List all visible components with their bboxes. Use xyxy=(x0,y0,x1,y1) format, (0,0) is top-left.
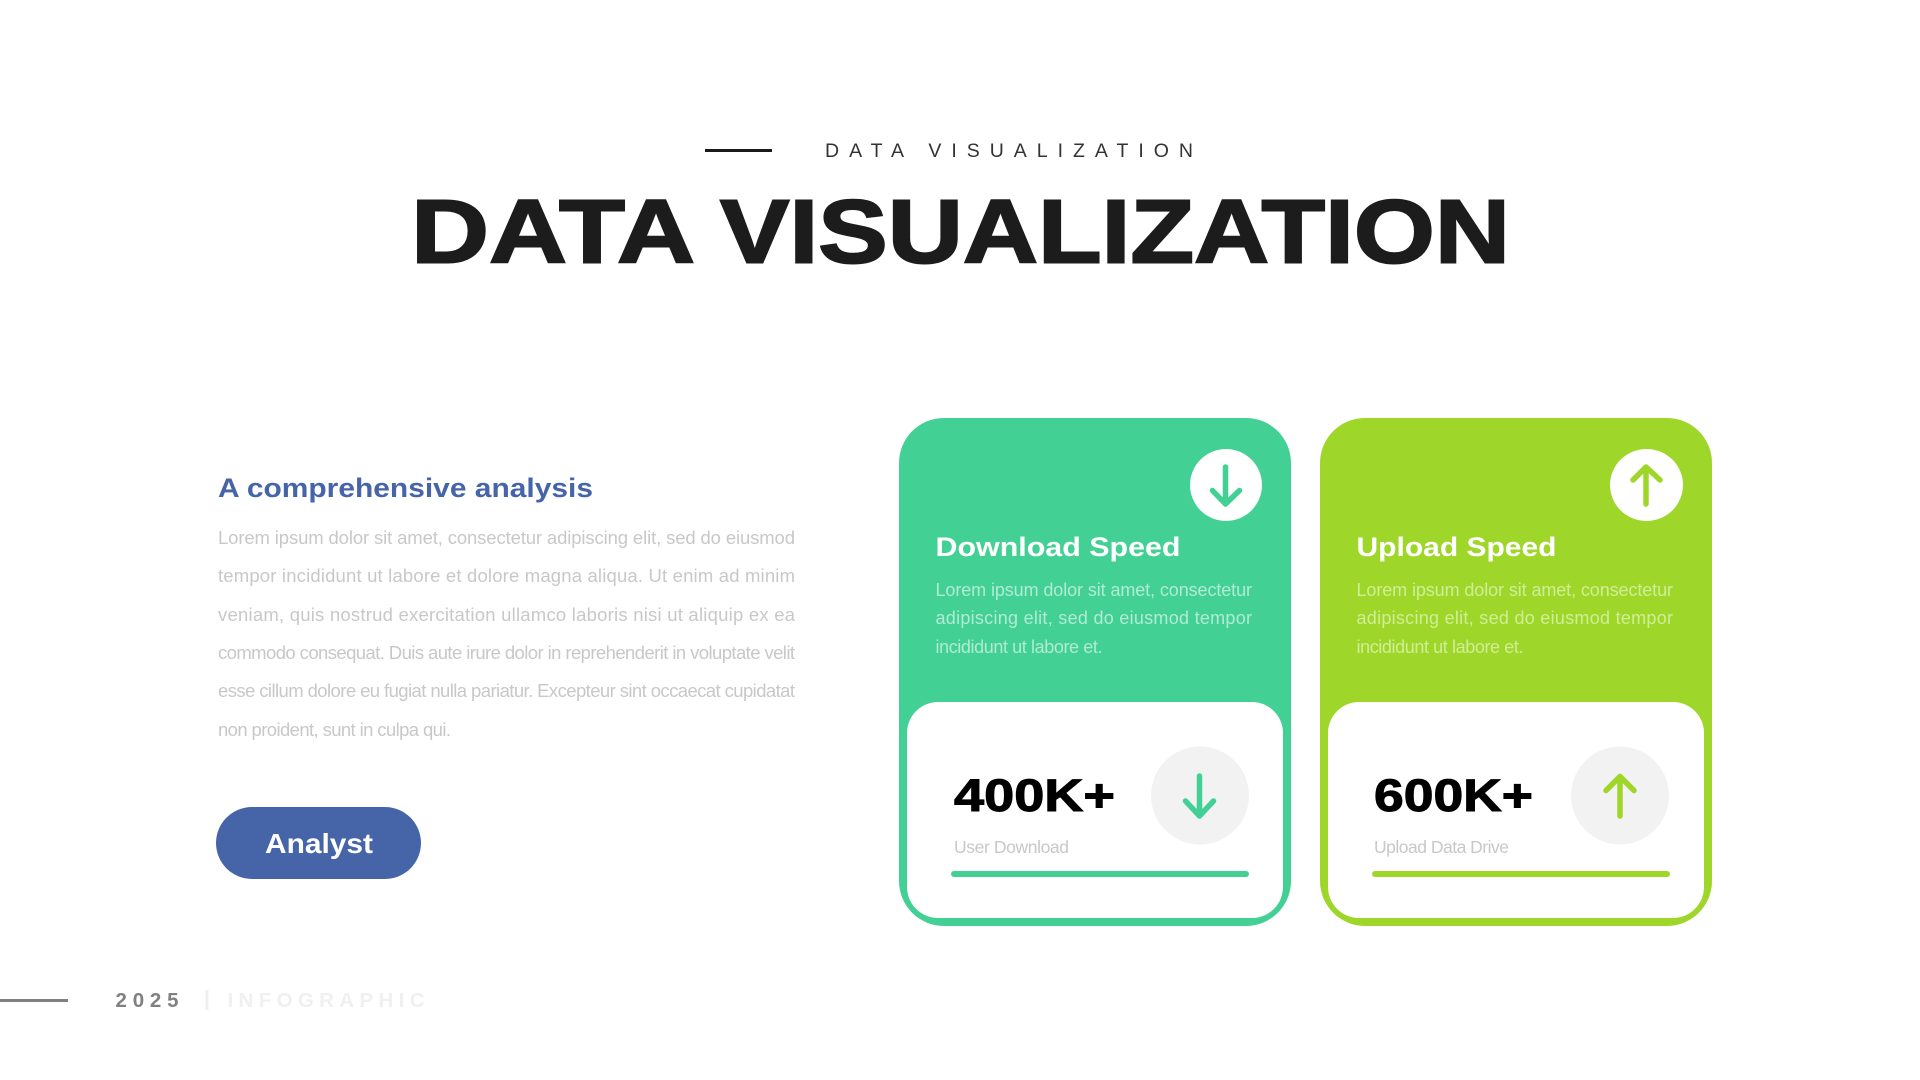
stat panel xyxy=(1328,702,1704,918)
card heading: Upload Speed xyxy=(1356,532,1556,562)
progress bar xyxy=(1372,871,1670,877)
stat label: Upload Data Drive xyxy=(1374,837,1509,857)
kicker text: DATA VISUALIZATION xyxy=(825,140,1193,162)
card background xyxy=(1320,418,1712,926)
heading: A comprehensive analysis xyxy=(218,473,593,503)
stat label: User Download xyxy=(954,837,1069,857)
footer rule xyxy=(0,999,68,1002)
title: DATA xyxy=(411,182,695,282)
body paragraph xyxy=(218,527,796,740)
title: VISUALIZATION xyxy=(720,182,1510,282)
button: Analyst: Analyst xyxy=(265,828,373,859)
footer label: INFOGRAPHIC xyxy=(228,989,425,1012)
body paragraph: veniam, quis nostrud exercitation ullamco laboris nisi ut aliquip ex ea xyxy=(218,604,796,625)
stat value: 400K+ xyxy=(954,770,1115,821)
footer xyxy=(0,989,425,1012)
title xyxy=(411,182,1510,282)
card description xyxy=(1356,580,1673,657)
progress bar xyxy=(951,871,1249,877)
panel: left analysis text xyxy=(216,473,796,879)
kicker rule xyxy=(705,149,772,152)
icon: download arrow in grey circle xyxy=(1151,746,1249,844)
body paragraph: esse cillum dolore eu fugiat nulla pariatur. Excepteur sint occaecat cupidatat xyxy=(218,680,795,701)
card description: incididunt ut labore et. xyxy=(936,637,1102,657)
body paragraph: Lorem ipsum dolor sit amet, consectetur adipiscing elit, sed do eiusmod xyxy=(218,527,795,548)
header xyxy=(411,140,1510,282)
card description: incididunt ut labore et. xyxy=(1356,637,1524,657)
icon: download arrow badge xyxy=(1190,449,1262,521)
card description: Lorem ipsum dolor sit amet, consectetur xyxy=(1356,580,1673,600)
button: Analyst xyxy=(216,807,421,879)
body paragraph: non proident, sunt in culpa qui. xyxy=(218,719,451,740)
footer separator xyxy=(206,990,208,1010)
card description: Lorem ipsum dolor sit amet, consectetur xyxy=(936,580,1252,600)
card background xyxy=(899,418,1291,926)
body paragraph: commodo consequat. Duis aute irure dolor in reprehenderit in voluptate velit xyxy=(218,642,795,663)
panel: upload speed card xyxy=(1320,418,1712,926)
panel: download speed card xyxy=(899,418,1291,926)
stat panel xyxy=(907,702,1283,918)
card description: adipiscing elit, sed do eiusmod tempor xyxy=(936,608,1252,628)
card heading: Download Speed xyxy=(936,532,1180,562)
footer year: 2025 xyxy=(116,989,178,1012)
icon: upload arrow in grey circle xyxy=(1571,746,1669,844)
body paragraph: tempor incididunt ut labore et dolore magna aliqua. Ut enim ad minim xyxy=(218,565,795,586)
stat value: 600K+ xyxy=(1374,770,1533,821)
card description: adipiscing elit, sed do eiusmod tempor xyxy=(1356,608,1673,628)
card description xyxy=(936,580,1252,657)
icon: upload arrow badge xyxy=(1610,449,1683,521)
